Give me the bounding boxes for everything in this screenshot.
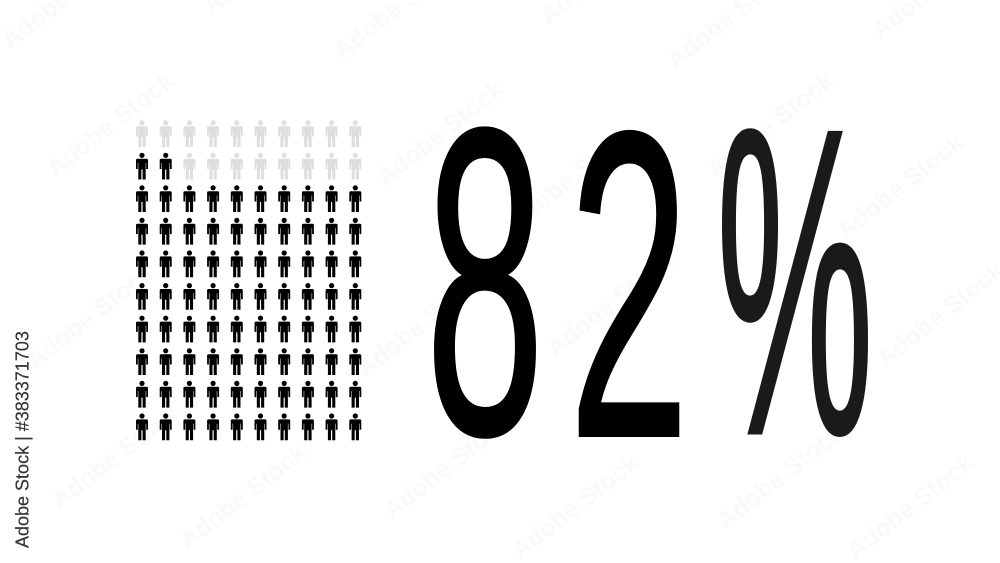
watermark pattern: Adobe Stock xyxy=(841,449,979,563)
watermark pattern: Adobe Stock xyxy=(711,419,849,535)
digit 2: 2 xyxy=(568,41,690,530)
watermark pattern: Adobe Stock xyxy=(541,247,679,363)
watermark pattern: Adobe Stock xyxy=(21,259,159,375)
percentage number xyxy=(425,37,874,530)
rows 3 to 10: all black xyxy=(136,185,361,440)
watermark pattern: Adobe Stock xyxy=(351,267,489,383)
percent sign: % xyxy=(716,37,874,526)
stock id caption: Adobe Stock | #383371703 xyxy=(12,331,32,548)
row 2: two black, eight grey xyxy=(136,153,361,180)
pictogram grid: 82 of 100 people filled xyxy=(136,120,361,440)
watermark pattern: Adobe Stock xyxy=(501,121,639,237)
watermark pattern: Adobe Stock xyxy=(46,399,184,515)
watermark pattern: Adobe Stock xyxy=(41,67,179,183)
watermark pattern: Adobe Stock xyxy=(831,129,969,245)
watermark pattern: Adobe Stock xyxy=(174,439,312,555)
digit 8: 8 xyxy=(425,37,545,526)
watermark pattern: Adobe Stock xyxy=(378,409,516,525)
watermark pattern: Adobe Stock xyxy=(506,449,644,563)
watermark pattern: Adobe Stock xyxy=(371,76,509,192)
watermark pattern: Adobe Stock xyxy=(701,67,839,183)
row 1: all grey xyxy=(136,120,361,147)
